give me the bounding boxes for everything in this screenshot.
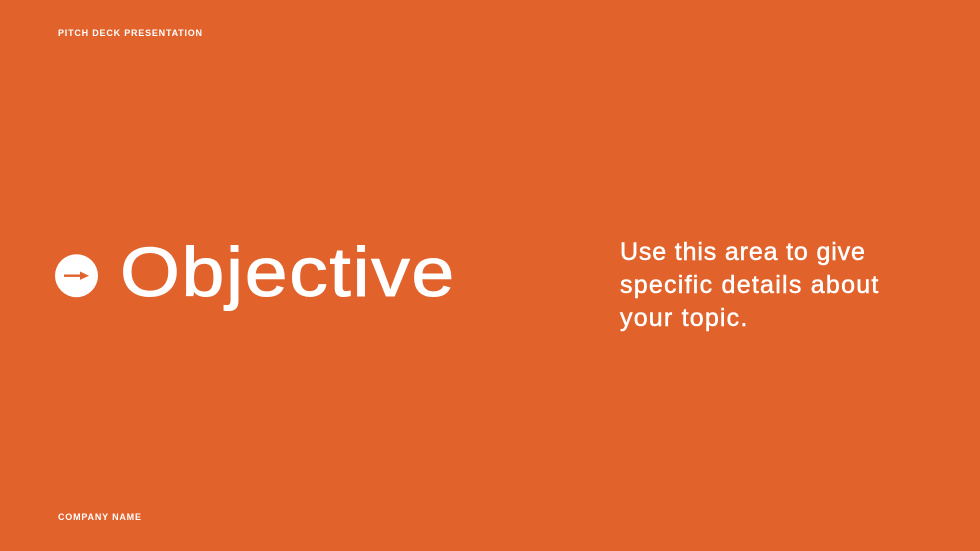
header label: PITCH DECK PRESENTATION xyxy=(58,28,203,38)
footer label: COMPANY NAME xyxy=(58,512,142,522)
icon: arrow in circle xyxy=(55,254,98,298)
description text: Use this area to give xyxy=(620,238,866,266)
description text: your topic. xyxy=(620,304,749,332)
title: Objective xyxy=(120,233,456,311)
description text xyxy=(620,238,880,332)
description text: specific details about xyxy=(620,271,880,299)
